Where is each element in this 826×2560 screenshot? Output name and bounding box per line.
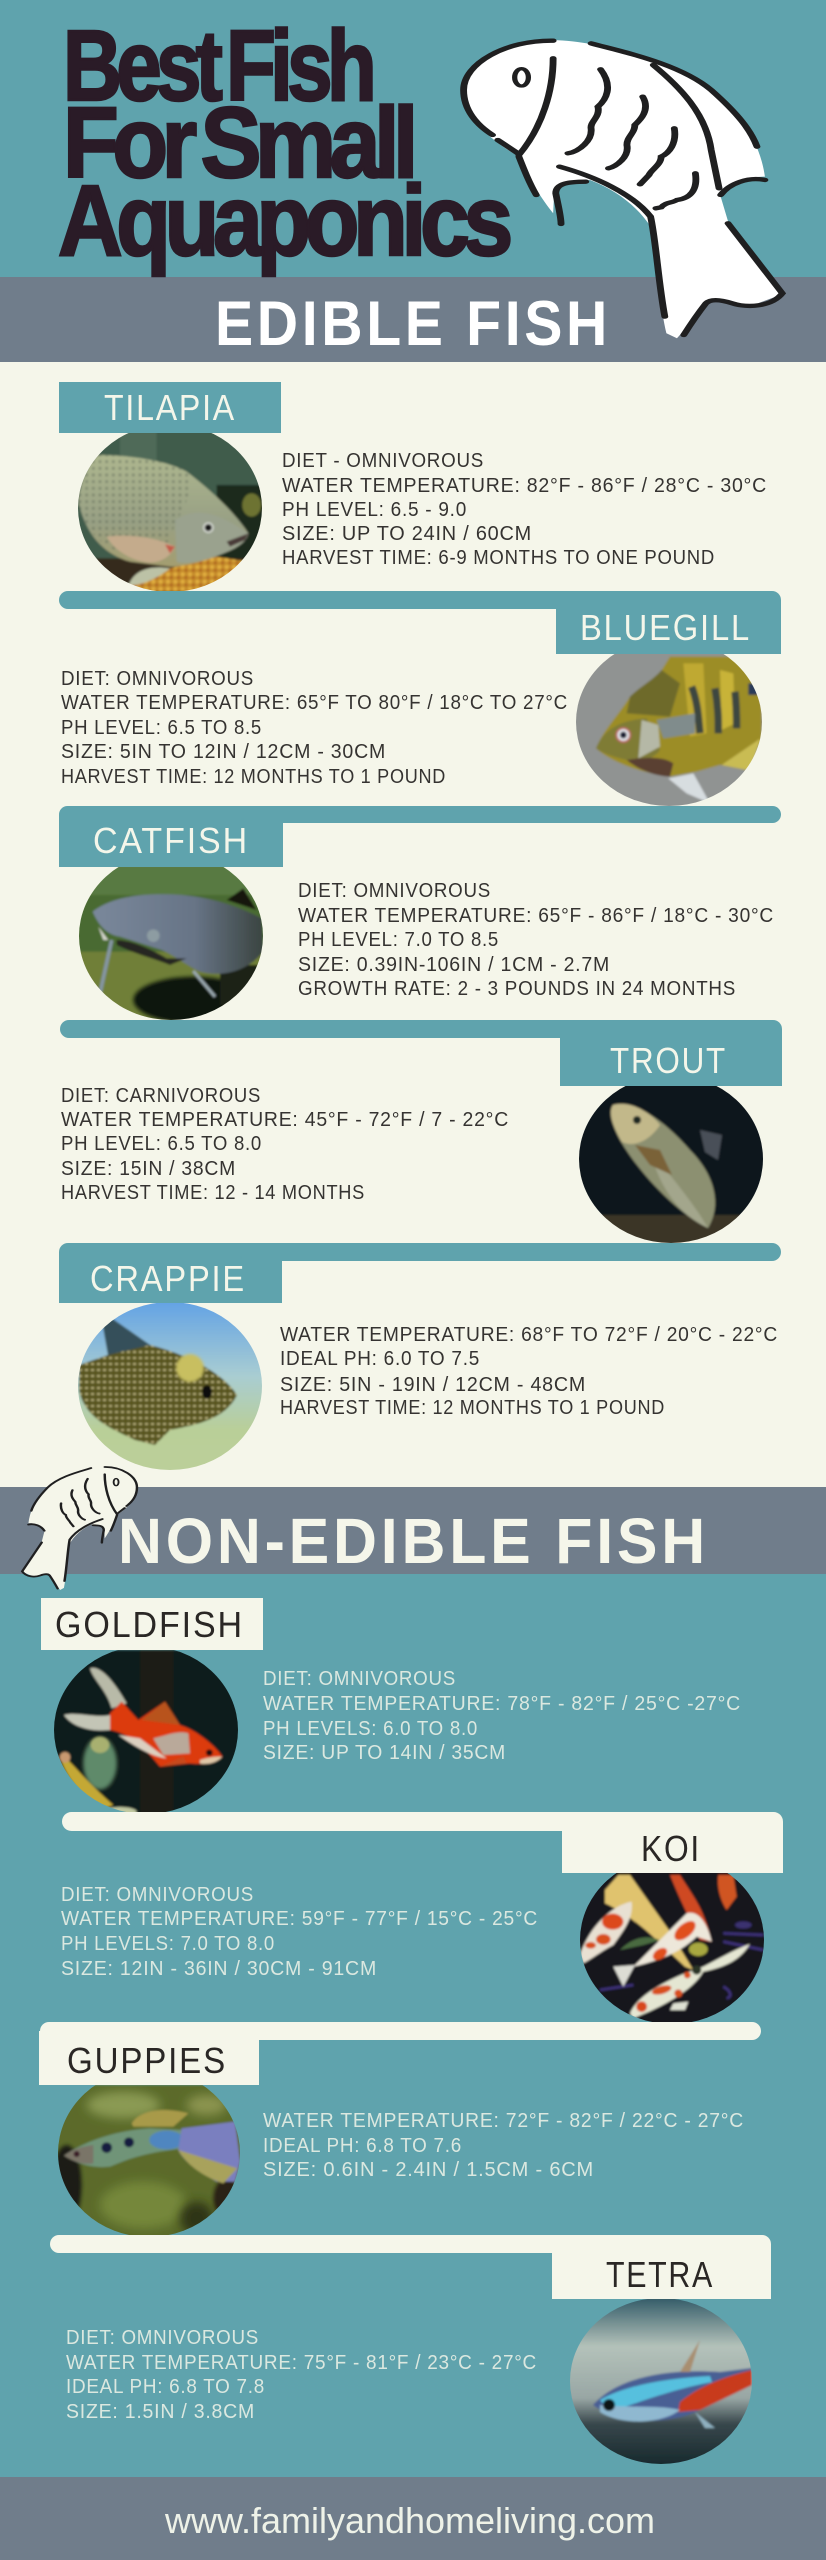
text: bluegill facts: HARVEST TIME: 12 MONTHS TO 1 POUND [61,765,446,788]
text: tetra facts: SIZE: 1.5IN / 3.8CM [66,2400,255,2423]
text: goldfish facts: PH LEVELS: 6.0 TO 8.0 [263,1717,478,1740]
label: koi with bar [62,1812,783,1873]
panel: catfish [59,806,781,1025]
text: tilapia facts [282,449,767,569]
band: non-edible fish [0,1487,826,1577]
label: tilapia [59,382,281,433]
panel: koi [61,1812,783,2025]
text: guppies facts: IDEAL PH: 6.8 TO 7.6 [263,2134,462,2157]
page background: cream edible section [0,362,826,1487]
title [58,10,510,277]
text: tilapia facts: SIZE: UP TO 24IN / 60CM [282,522,532,545]
photo: guppies [58,2085,240,2235]
band: non-edible fish: NON-EDIBLE FISH [118,1505,709,1577]
text: trout facts: WATER TEMPERATURE: 45°F - 72°F / 7 - 22°C [61,1108,509,1131]
text: goldfish facts: SIZE: UP TO 14IN / 35CM [263,1741,506,1764]
text: crappie facts: SIZE: 5IN - 19IN / 12CM - 48CM [280,1373,586,1396]
panel: tilapia [59,382,767,595]
photo: koi [580,1873,764,2022]
text: tilapia facts: WATER TEMPERATURE: 82°F - 86°F / 28°C - 30°C [282,474,767,497]
label: koi with bar: KOI [641,1828,701,1869]
text: crappie facts: WATER TEMPERATURE: 68°F TO 72°F / 20°C - 22°C [280,1323,778,1346]
panel: crappie [59,1243,781,1475]
label: crappie with bar: CRAPPIE [90,1258,246,1299]
text: koi facts [61,1883,538,1980]
band: edible fish [0,277,826,362]
text: koi facts: PH LEVELS: 7.0 TO 8.0 [61,1932,275,1955]
text: tilapia facts: PH LEVEL: 6.5 - 9.0 [282,498,467,521]
text: koi facts: WATER TEMPERATURE: 59°F - 77°F / 15°C - 25°C [61,1907,538,1930]
band: edible fish: EDIBLE FISH [215,289,611,359]
text: catfish facts: WATER TEMPERATURE: 65°F - 86°F / 18°C - 30°C [298,904,774,927]
label: guppies with bar [39,2022,761,2085]
panel: guppies [39,2022,761,2240]
text: tetra facts: DIET: OMNIVOROUS [66,2326,259,2349]
text: trout facts: DIET: CARNIVOROUS [61,1084,261,1107]
label: tilapia: TILAPIA [104,387,236,428]
title: For Small [63,87,412,199]
text: catfish facts: DIET: OMNIVOROUS [298,879,491,902]
text: tilapia facts: HARVEST TIME: 6-9 MONTHS TO ONE POUND [282,546,715,569]
footer [0,2477,826,2560]
photo: trout [579,1086,763,1243]
label: crappie with bar [59,1243,781,1303]
text: tetra facts: WATER TEMPERATURE: 75°F - 81°F / 23°C - 27°C [66,2351,537,2374]
text: crappie facts: IDEAL PH: 6.0 TO 7.5 [280,1347,480,1370]
text: bluegill facts: SIZE: 5IN TO 12IN / 12CM - 30CM [61,740,386,763]
icon: large white fish [464,40,785,338]
icon: small cream fish [21,1467,137,1590]
photo: tetra [570,2299,752,2464]
text: goldfish facts [263,1667,741,1764]
text: goldfish facts: WATER TEMPERATURE: 78°F - 82°F / 25°C -27°C [263,1692,741,1715]
text: tetra facts [66,2326,537,2423]
photo: catfish [79,867,263,1020]
label: catfish with bar [59,806,781,867]
panel: goldfish [41,1598,741,1816]
text: goldfish facts: DIET: OMNIVOROUS [263,1667,456,1690]
panel: trout [60,1020,782,1250]
title: Aquaponics [58,165,510,277]
label: goldfish: GOLDFISH [55,1604,244,1645]
photo: goldfish [54,1650,238,1812]
text: trout facts: PH LEVEL: 6.5 TO 8.0 [61,1132,262,1155]
title: Best Fish [63,10,372,122]
label: trout with bar: TROUT [610,1040,727,1081]
photo: tilapia [78,433,262,591]
text: guppies facts [263,2109,744,2181]
text: bluegill facts: DIET: OMNIVOROUS [61,667,254,690]
text: catfish facts: PH LEVEL: 7.0 TO 8.5 [298,928,499,951]
text: trout facts: HARVEST TIME: 12 - 14 MONTHS [61,1181,365,1204]
text: bluegill facts: PH LEVEL: 6.5 TO 8.5 [61,716,262,739]
text: catfish facts: SIZE: 0.39IN-106IN / 1CM - 2.7M [298,953,610,976]
text: crappie facts: HARVEST TIME: 12 MONTHS TO 1 POUND [280,1396,665,1419]
panel: bluegill [59,591,781,810]
text: guppies facts: WATER TEMPERATURE: 72°F - 82°F / 22°C - 27°C [263,2109,744,2132]
photo: crappie [78,1303,262,1470]
text: koi facts: DIET: OMNIVOROUS [61,1883,254,1906]
text: koi facts: SIZE: 12IN - 36IN / 30CM - 91CM [61,1957,377,1980]
label: tetra with bar [50,2235,771,2299]
footer: www.familyandhomeliving.com [164,2500,655,2541]
text: tilapia facts: DIET - OMNIVOROUS [282,449,484,472]
panel: tetra [50,2235,771,2467]
text: tetra facts: IDEAL PH: 6.8 TO 7.8 [66,2375,265,2398]
label: bluegill with bar: BLUEGILL [580,607,751,648]
label: trout with bar [60,1020,782,1086]
text: bluegill facts [61,667,568,788]
text: guppies facts: SIZE: 0.6IN - 2.4IN / 1.5CM - 6CM [263,2158,594,2181]
text: catfish facts [298,879,774,1000]
text: trout facts [61,1084,509,1204]
text: trout facts: SIZE: 15IN / 38CM [61,1157,236,1180]
text: bluegill facts: WATER TEMPERATURE: 65°F TO 80°F / 18°C TO 27°C [61,691,568,714]
page background: teal header [0,0,826,277]
photo: bluegill [576,654,762,806]
label: guppies with bar: GUPPIES [67,2040,227,2081]
label: tetra with bar: TETRA [606,2254,714,2295]
page background: teal non-edible section [0,1574,826,2477]
label: catfish with bar: CATFISH [93,820,249,861]
label: bluegill with bar [59,591,781,654]
text: catfish facts: GROWTH RATE: 2 - 3 POUNDS IN 24 MONTHS [298,977,736,1000]
text: crappie facts [280,1323,778,1419]
